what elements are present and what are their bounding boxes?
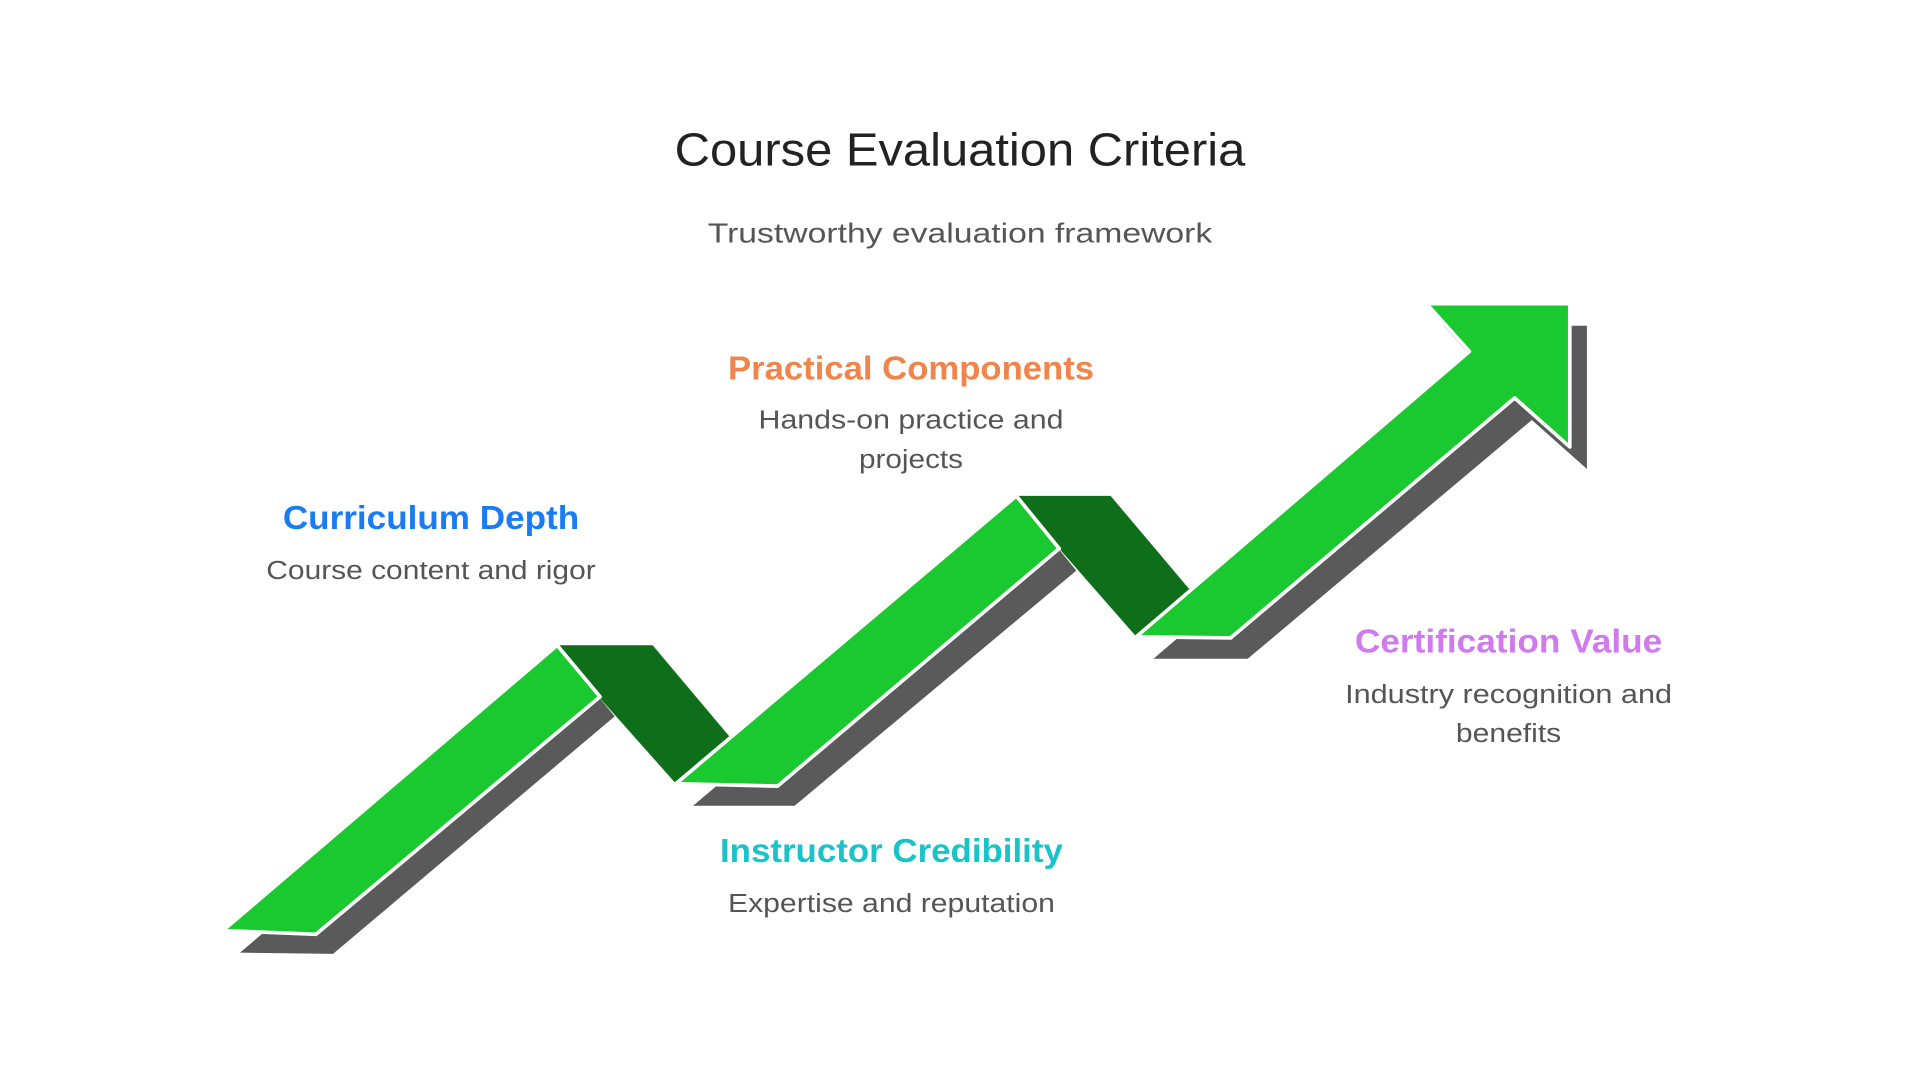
arrow: zigzag growth arrow — [223, 304, 1587, 954]
label: Certification Value: Industry recognition and — [1345, 681, 1672, 709]
label: Practical Components: Practical Components — [728, 351, 1094, 388]
label: Certification Value: Certification Value — [1355, 624, 1662, 661]
label: Practical Components — [728, 351, 1094, 474]
label: Practical Components: Hands-on practice and — [759, 407, 1063, 435]
label: Certification Value — [1345, 624, 1672, 748]
title: Course Evaluation Criteria — [675, 123, 1245, 175]
label: Certification Value: benefits — [1456, 720, 1561, 748]
label: Curriculum Depth: Curriculum Depth — [283, 500, 579, 537]
label: Curriculum Depth: Course content and rigor — [266, 557, 596, 585]
label: Instructor Credibility: Expertise and reputation — [728, 890, 1055, 918]
label: Instructor Credibility — [720, 833, 1064, 918]
label: Curriculum Depth — [266, 500, 596, 585]
label: Practical Components: projects — [859, 446, 963, 474]
label: Instructor Credibility: Instructor Credibility — [720, 833, 1064, 870]
subtitle: Trustworthy evaluation framework — [708, 217, 1213, 248]
